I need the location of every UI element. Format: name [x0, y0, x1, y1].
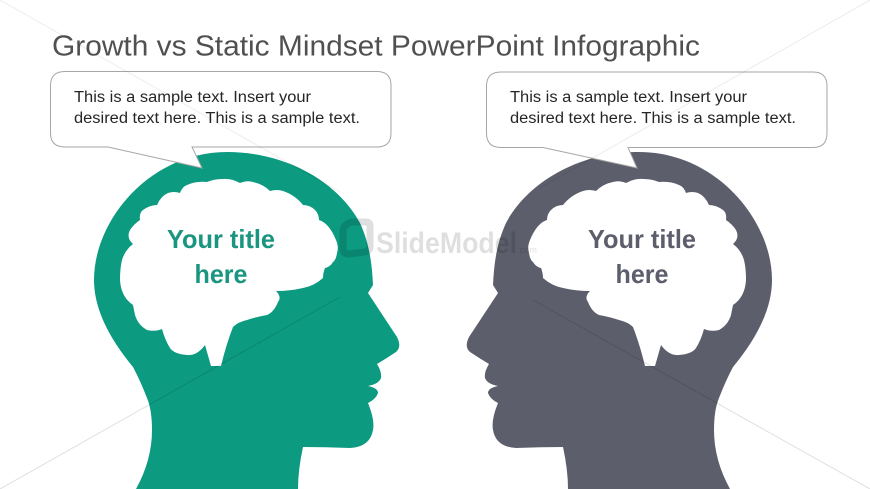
- brain label: growth mindset: here: [194, 259, 248, 289]
- callout text: static mindset: This is a sample text. Insert your: [510, 89, 747, 106]
- callout text: growth mindset: desired text here. This is a sample text.: [74, 110, 360, 127]
- brain label: growth mindset: Your title: [167, 224, 275, 254]
- callout text: growth mindset: This is a sample text. Insert your: [74, 89, 311, 106]
- title: Growth vs Static Mindset PowerPoint Infographic: [52, 30, 700, 62]
- watermark: SlideModel: [376, 227, 517, 260]
- brain label: static mindset: here: [616, 259, 668, 289]
- brain label: static mindset: Your title: [588, 224, 696, 254]
- head: growth mindset: [94, 152, 399, 489]
- head: static mindset: [467, 152, 772, 489]
- callout: growth mindset: [50, 72, 391, 168]
- watermark: .com: [517, 245, 537, 255]
- callout: static mindset: [486, 72, 827, 168]
- callout text: static mindset: desired text here. This is a sample text.: [510, 110, 796, 127]
